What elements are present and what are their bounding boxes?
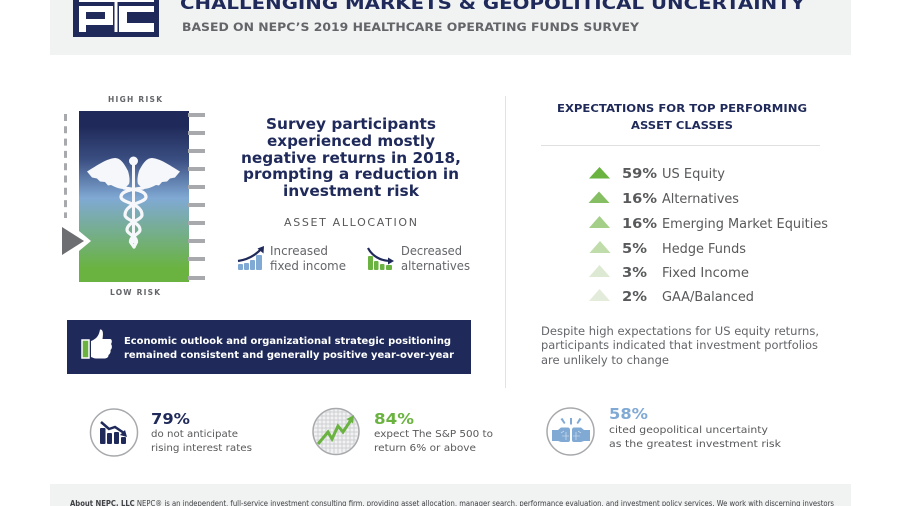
- row: alternatives: [588, 192, 739, 207]
- high risk label: HIGH RISK: [108, 95, 163, 104]
- expectations panel: [541, 102, 828, 367]
- increased fixed income: [238, 244, 346, 273]
- stat: s&p 500: expect The S&P 500 to: [374, 429, 493, 440]
- header band: [50, 0, 851, 55]
- expectations note: [541, 324, 819, 367]
- icon: thumbs up: [82, 329, 112, 358]
- footer band: [50, 484, 851, 506]
- survey statement: experienced mostly: [267, 132, 435, 150]
- row: hedge funds: [590, 241, 746, 257]
- expectations note: are unlikely to change: [541, 353, 669, 367]
- stat: interest rates: [90, 409, 252, 456]
- expectations note: Despite high expectations for US equity returns,: [541, 324, 819, 338]
- expectations heading: ASSET CLASSES: [631, 119, 733, 132]
- row: us equity: [589, 167, 725, 182]
- row: emerging market equities: [589, 216, 828, 232]
- row: emerging market equities: Emerging Market Equities: [662, 217, 828, 232]
- callout banner: remained consistent and generally positive year-over-year: [124, 350, 454, 361]
- stat: geopolitical risk: 58%: [609, 405, 648, 423]
- survey statement: investment risk: [283, 182, 420, 200]
- row: alternatives: Alternatives: [662, 192, 739, 207]
- expectations heading: EXPECTATIONS FOR TOP PERFORMING: [557, 102, 807, 115]
- icon: falling bars: [368, 248, 394, 270]
- row: us equity: US Equity: [662, 167, 725, 182]
- decreased alternatives: Decreased: [401, 244, 462, 258]
- row: gaa/balanced: GAA/Balanced: [662, 290, 754, 305]
- stat: interest rates: 79%: [151, 410, 190, 428]
- stat: interest rates: rising interest rates: [151, 443, 252, 454]
- vertical divider: [504, 96, 506, 388]
- scale ticks: [188, 113, 205, 280]
- stat: geopolitical risk: [547, 405, 781, 455]
- decreased alternatives: [368, 244, 470, 273]
- icon: rising line on grid: [313, 408, 359, 454]
- increased fixed income: Increased: [270, 244, 328, 258]
- logo: [73, 0, 159, 37]
- icon: caduceus: [87, 156, 180, 247]
- survey statement: [241, 115, 461, 200]
- increased fixed income: fixed income: [270, 259, 346, 273]
- dashed risk track: [64, 114, 67, 218]
- callout banner: Economic outlook and organizational strategic positioning: [124, 336, 451, 347]
- row: gaa/balanced: [589, 289, 754, 305]
- expectations heading: [557, 102, 807, 132]
- risk gauge: [62, 95, 205, 297]
- asset allocation heading: ASSET ALLOCATION: [284, 216, 417, 229]
- decreased alternatives: alternatives: [401, 259, 470, 273]
- stat: s&p 500: 84%: [374, 410, 414, 428]
- row: hedge funds: Hedge Funds: [662, 242, 746, 257]
- row: emerging market equities: 16%: [622, 217, 657, 232]
- subtitle: BASED ON NEPC’S 2019 HEALTHCARE OPERATING FUNDS SURVEY: [182, 20, 640, 34]
- gradient column: [79, 111, 189, 282]
- icon: clashing fists: [547, 408, 594, 455]
- row: us equity: 59%: [622, 167, 657, 182]
- stat: s&p 500: [313, 408, 493, 454]
- row: alternatives: 16%: [622, 192, 657, 207]
- callout banner: [67, 320, 471, 374]
- stat: interest rates: do not anticipate: [151, 429, 238, 440]
- expectations note: participants indicated that investment portfolios: [541, 338, 818, 352]
- stat: geopolitical risk: as the greatest investment risk: [609, 439, 781, 450]
- row: fixed income: 3%: [622, 266, 647, 281]
- stat: s&p 500: return 6% or above: [374, 443, 476, 454]
- row: fixed income: [589, 265, 749, 281]
- icon: falling chart: [90, 409, 138, 456]
- survey statement: negative returns in 2018,: [241, 149, 461, 167]
- low risk label: LOW RISK: [110, 288, 161, 297]
- row: gaa/balanced: 2%: [622, 290, 647, 305]
- asset class list: [588, 167, 828, 305]
- risk level pointer: [62, 227, 91, 255]
- row: fixed income: Fixed Income: [662, 266, 749, 281]
- stat: geopolitical risk: cited geopolitical uncertainty: [609, 425, 768, 436]
- icon: rising bars: [238, 246, 264, 270]
- survey statement: Survey participants: [266, 115, 436, 133]
- row: hedge funds: 5%: [622, 242, 647, 257]
- survey statement: prompting a reduction in: [243, 165, 459, 183]
